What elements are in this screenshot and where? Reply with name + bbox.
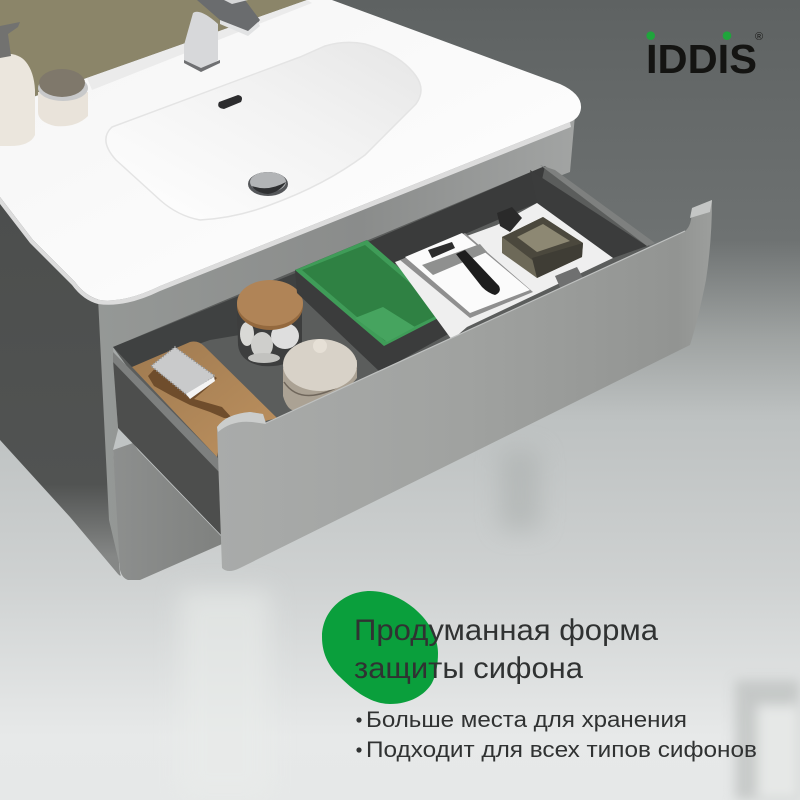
glass jar with cotton pads and wooden lid bbox=[237, 280, 303, 366]
bullet list: Подходит для всех типов сифонов bbox=[366, 737, 757, 762]
heading: Продуманная форма bbox=[354, 614, 658, 647]
soap dispenser bbox=[0, 22, 35, 146]
green blob accent bbox=[322, 591, 438, 704]
drawer front panel bbox=[217, 200, 712, 571]
basin bowl bbox=[106, 42, 421, 220]
wooden tray with hairbrush bbox=[132, 342, 277, 457]
smoked glass soap dish bbox=[497, 207, 583, 278]
drawer interior bbox=[113, 165, 655, 536]
heading: защиты сифона bbox=[354, 652, 583, 685]
vanity cabinet body bbox=[0, 115, 575, 580]
ceramic jar with lid bbox=[283, 339, 357, 411]
razor bbox=[428, 242, 500, 295]
small cream jar bbox=[38, 69, 88, 126]
folded white towel bbox=[395, 203, 613, 340]
bullet list bbox=[356, 707, 757, 762]
logo: IDDIS: ® bbox=[755, 31, 763, 43]
green organiser box bbox=[295, 240, 450, 372]
drain plug bbox=[248, 172, 288, 196]
heading bbox=[354, 614, 658, 685]
bullet list: Больше места для хранения bbox=[366, 707, 687, 732]
washbasin countertop bbox=[0, 0, 581, 305]
logo: IDDIS: IDDIS bbox=[646, 36, 757, 82]
chrome faucet bbox=[184, 0, 260, 72]
